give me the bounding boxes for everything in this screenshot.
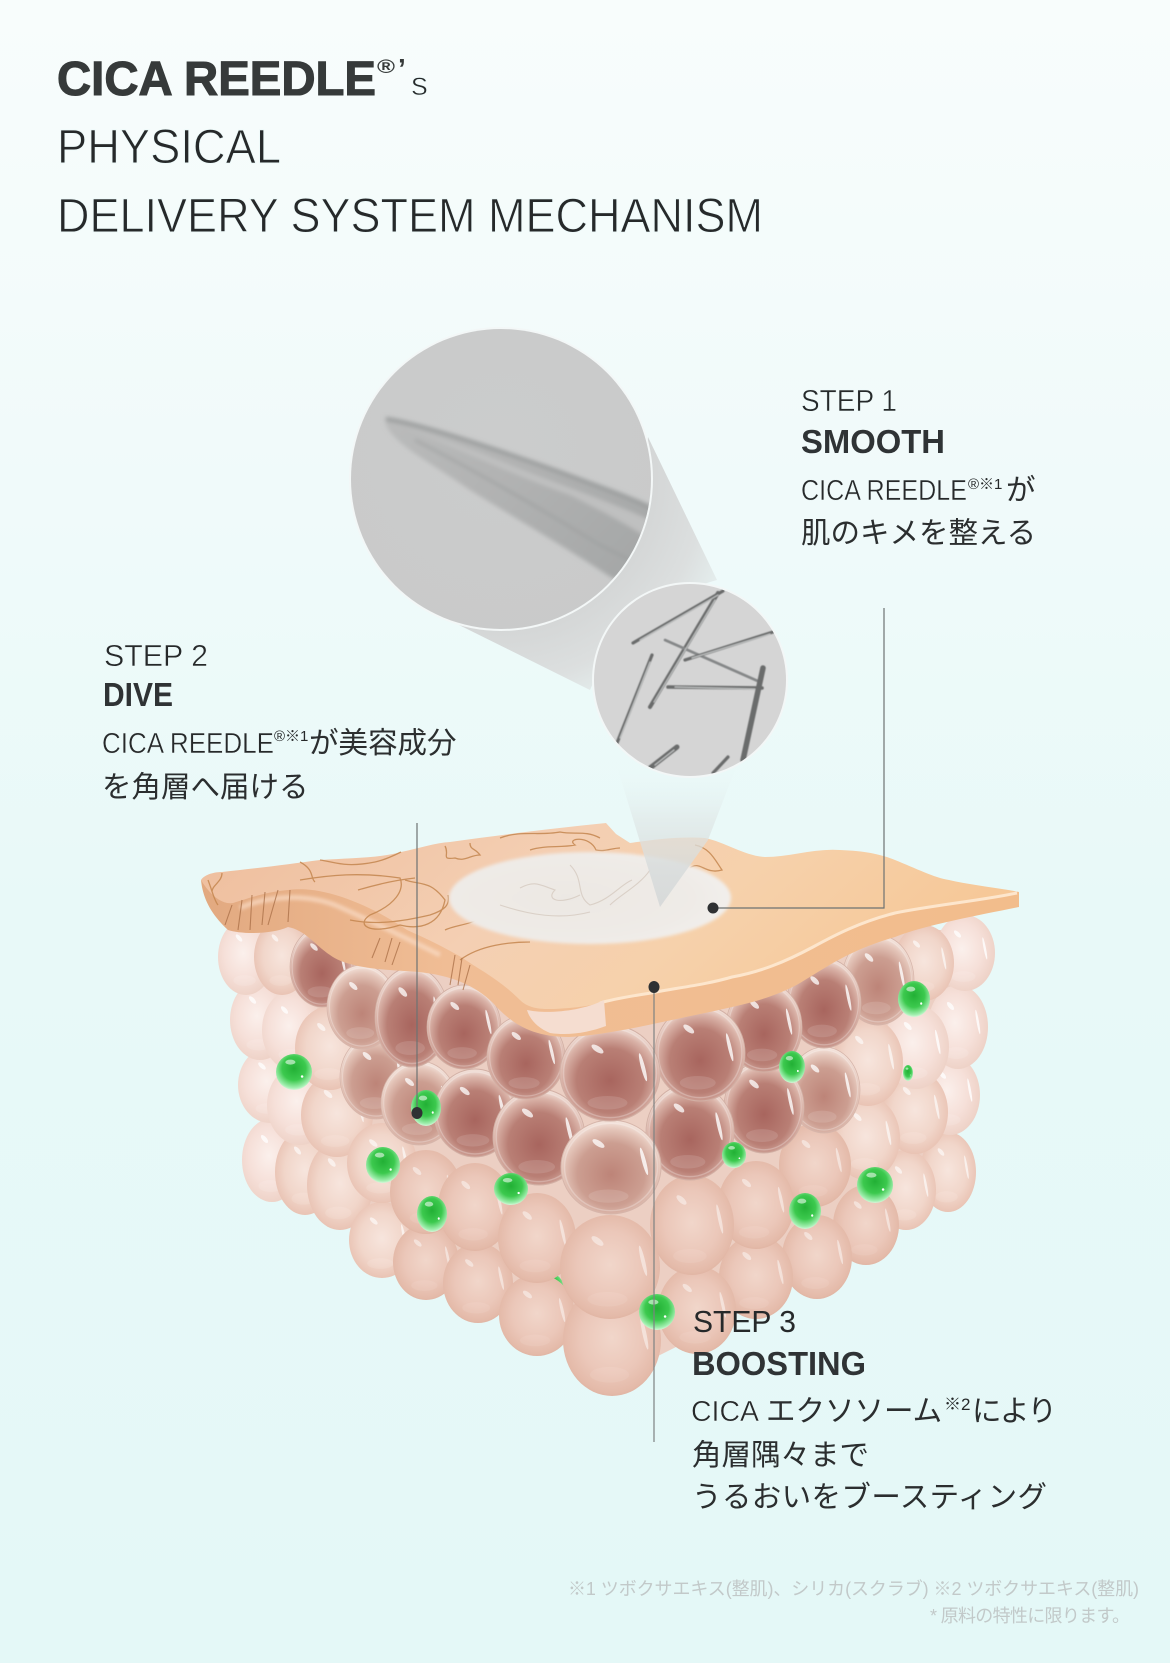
magnified needle cluster photo	[592, 582, 788, 778]
magnified needle photo	[349, 327, 660, 631]
leader line step 2	[412, 823, 422, 1119]
step 3 description: エクソソーム	[766, 1395, 942, 1428]
step 3 heading: BOOSTING	[692, 1345, 866, 1382]
leader line step 3	[648, 981, 660, 1442]
title line 2: PHYSICAL	[57, 121, 281, 174]
title line 1: s	[411, 65, 428, 102]
footnotes	[568, 1578, 1139, 1626]
footnote line 1: ※1 ツボクサエキス(整肌)、シリカ(スクラブ) ※2 ツボクサエキス(整肌)	[568, 1578, 1139, 1599]
step 2 description: CICA REEDLE	[102, 728, 274, 760]
sheet edge highlight	[600, 893, 1017, 1003]
title line 1: CICA REEDLE	[57, 53, 376, 106]
half-hidden droplet	[529, 1272, 565, 1310]
sheet front edge	[201, 880, 1019, 1037]
step 3 description: ※2	[944, 1395, 970, 1414]
top layer of bubbles	[218, 915, 995, 1121]
step 3 description: により	[972, 1395, 1057, 1428]
leader line step 1	[708, 608, 884, 914]
smoothed oval area	[449, 852, 731, 944]
light needle cores	[620, 595, 770, 765]
step 2 description: ®※1	[274, 728, 308, 745]
sheet top surface	[201, 823, 1019, 1009]
step 2 heading: DIVE	[103, 676, 173, 713]
green active droplets	[276, 981, 930, 1330]
skin sheet	[201, 823, 1019, 1037]
dry skin cracks	[208, 832, 722, 960]
title line 1: ’	[398, 53, 406, 84]
notch patch on front edge	[527, 1000, 606, 1034]
wrinkled left edge	[225, 890, 470, 990]
step 1 description: ®※1	[968, 476, 1002, 493]
bubble backing fill	[255, 930, 975, 1375]
step 1 description	[801, 474, 1036, 550]
step 3 description: CICA	[691, 1396, 760, 1428]
step 2 description: を角層へ届ける	[102, 771, 309, 804]
third layer of bubbles	[238, 1047, 980, 1319]
second layer of bubbles	[230, 980, 988, 1214]
step 1 description: 肌のキメを整える	[801, 517, 1036, 550]
step 3 label: STEP 3	[693, 1304, 796, 1339]
footnote line 2: * 原料の特性に限ります。	[930, 1606, 1130, 1626]
magnifier cone from big circle to small circle	[453, 437, 717, 690]
title line 3: DELIVERY SYSTEM MECHANISM	[57, 190, 763, 243]
needle shape	[385, 417, 660, 590]
step 3 description: うるおいをブースティング	[692, 1481, 1047, 1514]
step 1 description: CICA REEDLE	[801, 475, 967, 507]
step 2 callout	[102, 638, 457, 1119]
dark needle strokes	[617, 591, 773, 773]
step 2 label: STEP 2	[104, 638, 208, 673]
title	[57, 53, 763, 243]
step 3 description	[691, 1395, 1057, 1514]
skin cell stack illustration	[201, 823, 1019, 1396]
step 3 callout	[648, 981, 1057, 1514]
step 2 description	[102, 727, 457, 804]
step 3 description: 角層隅々まで	[692, 1439, 869, 1472]
step 1 label: STEP 1	[801, 383, 897, 418]
step 2 description: が美容成分	[309, 727, 457, 760]
title line 1: ®	[377, 57, 395, 78]
left edge gloss	[240, 898, 440, 955]
magnifier cone from small circle to skin	[618, 770, 735, 907]
step 1 description: が	[1006, 474, 1036, 507]
step 1 heading: SMOOTH	[801, 423, 945, 460]
bottom layer of bubbles	[242, 1118, 976, 1396]
step 1 callout	[708, 383, 1036, 914]
